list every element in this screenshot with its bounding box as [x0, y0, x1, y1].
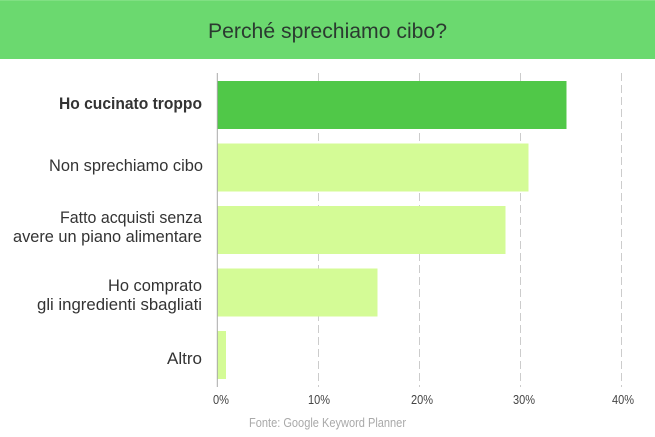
- horizontal axis labels: 30%: [513, 392, 535, 407]
- horizontal axis labels: 0%: [213, 392, 229, 407]
- bar: Altro: [217, 331, 226, 379]
- category labels: [13, 94, 203, 368]
- label: Fatto acquisti senza avere un piano alimentare: [13, 208, 203, 246]
- bar: Non sprechiamo cibo: [217, 144, 528, 192]
- horizontal axis labels: [213, 392, 634, 407]
- label: Fatto acquisti senza avere un piano alimentare: avere un piano alimentare: [13, 227, 202, 246]
- label: Ho comprato gli ingredienti sbagliati: Ho comprato: [108, 276, 202, 295]
- bar chart: [217, 81, 566, 379]
- label: Altro: Altro: [167, 349, 202, 368]
- label: Non sprechiamo cibo: Non sprechiamo cibo: [49, 156, 203, 175]
- label: Ho comprato gli ingredienti sbagliati: gli ingredienti sbagliati: [37, 295, 202, 314]
- horizontal axis labels: 10%: [308, 392, 330, 407]
- bar: Ho cucinato troppo: [217, 81, 566, 129]
- horizontal axis labels: 20%: [411, 392, 433, 407]
- header banner: [0, 0, 655, 59]
- title: Perché sprechiamo cibo?: [208, 20, 447, 43]
- horizontal axis labels: 40%: [612, 392, 634, 407]
- label: Ho cucinato troppo: Ho cucinato troppo: [59, 94, 202, 113]
- label: Fatto acquisti senza avere un piano alimentare: Fatto acquisti senza: [60, 208, 203, 227]
- vertical axis: [216, 73, 218, 387]
- bar: Fatto acquisti senza avere un piano alimentare: [217, 206, 506, 254]
- bar: Ho comprato gli ingredienti sbagliati: [217, 268, 378, 316]
- source note: Fonte: Google Keyword Planner: [249, 415, 407, 430]
- label: Ho comprato gli ingredienti sbagliati: [37, 276, 202, 314]
